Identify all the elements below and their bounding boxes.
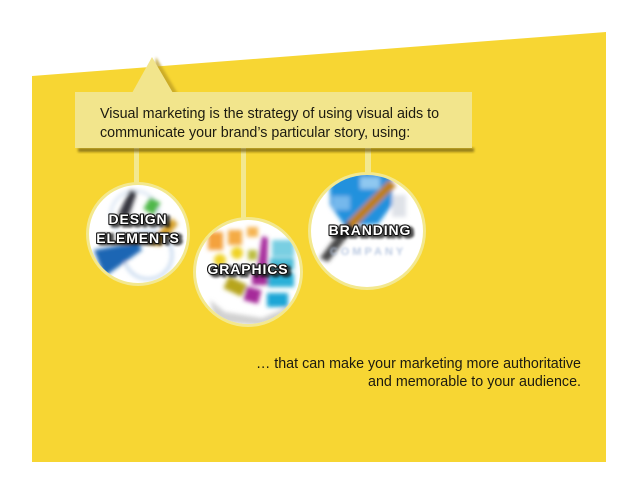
label: design elements: DESIGN	[111, 213, 171, 229]
circle: design elements	[86, 182, 190, 286]
connector stems	[134, 146, 371, 220]
label: design elements	[96, 211, 183, 247]
yellow background panel	[32, 32, 606, 462]
circle: branding: COMPANY	[330, 246, 406, 258]
label: design elements: ELEMENTS	[96, 230, 180, 246]
closing text: … that can make your marketing more authoritative	[256, 356, 581, 372]
circle: branding	[308, 170, 426, 290]
label: branding: BRANDING	[329, 222, 411, 238]
callout text: communicate your brand’s particular story, using:	[100, 125, 410, 141]
label: graphics: GRAPHICS	[210, 263, 292, 279]
callout box	[75, 57, 474, 152]
callout text: Visual marketing is the strategy of using visual aids to	[100, 106, 439, 122]
circle: graphics	[193, 217, 303, 327]
label: design elements: ELEMENTS	[99, 231, 183, 247]
closing text: and memorable to your audience.	[368, 374, 581, 390]
label: graphics: GRAPHICS	[207, 261, 289, 277]
label: branding: BRANDING	[332, 224, 414, 240]
label: design elements: DESIGN	[108, 211, 168, 227]
